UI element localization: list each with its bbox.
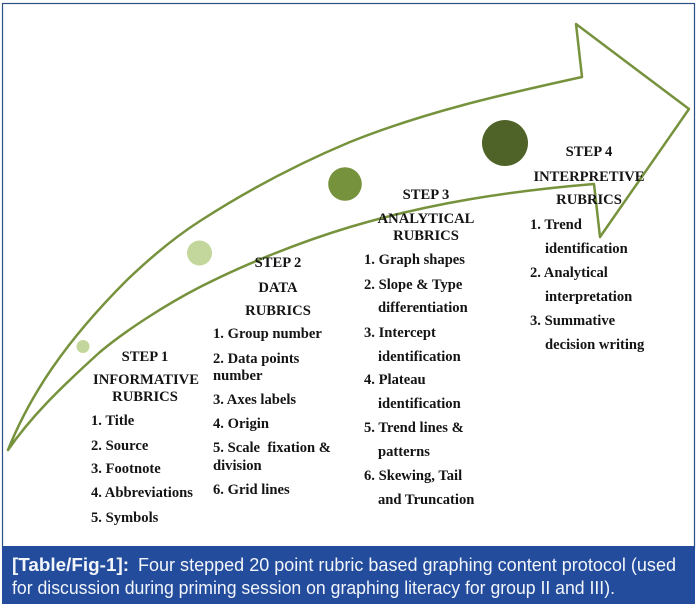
step 2 text block: DATA: [258, 280, 298, 296]
step 3 text block: 2. Slope & Type: [364, 277, 463, 293]
step 2 text block: STEP 2: [255, 255, 301, 271]
step 3 text block: and Truncation: [378, 492, 474, 508]
step 4 text block: 2. Analytical: [530, 265, 608, 281]
step 4 text block: interpretation: [545, 289, 632, 305]
caption bar: [2, 546, 695, 604]
step 2 text block: 1. Group number: [213, 326, 322, 342]
step 2 text block: 4. Origin: [213, 416, 269, 432]
step 3 text block: 5. Trend lines &: [364, 420, 464, 436]
step 3 text block: ANALYTICAL: [378, 211, 475, 227]
step 4 text block: [530, 144, 645, 353]
step 1 text block: RUBRICS: [112, 389, 178, 405]
step 1 text block: [91, 349, 199, 526]
step 3 text block: [364, 187, 475, 508]
step 3 text block: RUBRICS: [393, 228, 459, 244]
step 3 text block: 1. Graph shapes: [364, 252, 465, 268]
step 2 text block: 5. Scale fixation &: [213, 440, 331, 456]
step 3 marker: [328, 167, 362, 201]
step 2 text block: number: [213, 368, 263, 384]
step 2 text block: RUBRICS: [245, 303, 311, 319]
step 1 text block: 1. Title: [91, 413, 135, 429]
step 4 text block: STEP 4: [566, 144, 613, 160]
step 1 text block: 4. Abbreviations: [91, 485, 193, 501]
caption text: Four stepped 20 point rubric based graphing content protocol (used: [138, 555, 676, 575]
step 3 text block: 6. Skewing, Tail: [364, 468, 462, 484]
step 1 text block: STEP 1: [122, 349, 168, 365]
step 2 text block: division: [213, 458, 262, 474]
step 3 text block: 4. Plateau: [364, 372, 426, 388]
step 3 text block: differentiation: [378, 300, 468, 316]
step 1 text block: INFORMATIVE: [93, 372, 199, 388]
step 2 text block: 6. Grid lines: [213, 482, 290, 498]
step 3 text block: patterns: [378, 444, 430, 460]
step 4 text block: 3. Summative: [530, 313, 616, 329]
step 4 marker: [482, 120, 528, 166]
step 1 text block: 3. Footnote: [91, 461, 161, 477]
step 3 text block: 3. Intercept: [364, 325, 436, 341]
step 3 text block: identification: [378, 349, 461, 365]
step 4 text block: 1. Trend: [530, 217, 582, 233]
caption text: [12, 555, 676, 598]
step 2 text block: [213, 255, 331, 498]
step 1 text block: 2. Source: [91, 438, 149, 454]
step 3 text block: STEP 3: [403, 187, 449, 203]
step 2 marker: [187, 240, 212, 266]
step 4 text block: identification: [545, 241, 628, 257]
step 2 text block: 2. Data points: [213, 351, 300, 367]
step 4 text block: RUBRICS: [556, 192, 622, 208]
step 1 text block: 5. Symbols: [91, 510, 159, 526]
step 3 text block: identification: [378, 396, 461, 412]
caption text: [Table/Fig-1]:: [12, 555, 129, 575]
caption text: for discussion during priming session on graphing literacy for group II and III).: [12, 578, 615, 598]
step 1 marker: [76, 340, 90, 353]
step 2 text block: 3. Axes labels: [213, 392, 296, 408]
step 4 text block: INTERPRETIVE: [533, 169, 645, 185]
curved growth arrow: [8, 24, 689, 450]
step 4 text block: decision writing: [545, 337, 645, 353]
